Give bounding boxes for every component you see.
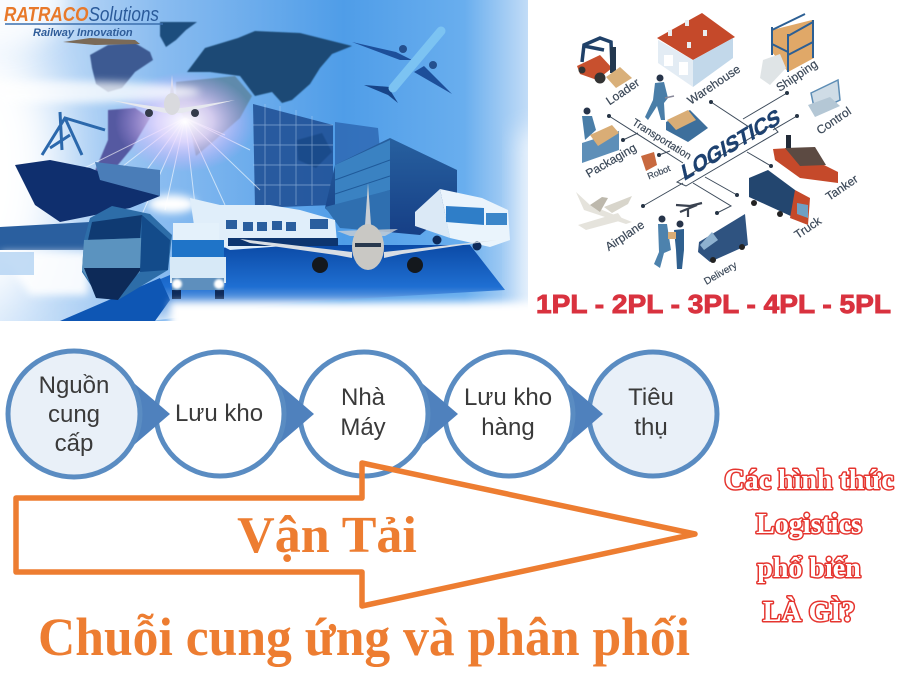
front lorry (170, 223, 226, 299)
connector lines (607, 91, 799, 215)
isometric labels: Packaging (583, 140, 639, 181)
airplane top right (352, 31, 452, 103)
stage: Lưu kho: Lưu kho (175, 400, 263, 427)
isometric labels: Truck (792, 213, 825, 242)
panel: transport photo collage (0, 0, 528, 321)
stage: Nguồn cung cấp: Nguồn (39, 372, 109, 399)
stage: Tiêu thụ: thụ (634, 414, 668, 441)
isometric labels: Shipping (773, 57, 820, 95)
airplane mid (110, 75, 235, 117)
shipping containers (253, 104, 457, 235)
callout: Các hình thức Logistics phổ biến là gì: phổ biến (757, 553, 861, 584)
isometric labels: Tanker (823, 172, 861, 204)
isometric labels: Warehouse (685, 62, 743, 108)
white bottom fade (163, 295, 528, 321)
stage: Nguồn cung cấp: cung (48, 401, 100, 428)
stage: Lưu kho hàng: Lưu kho (464, 384, 552, 411)
light burst (20, 76, 260, 218)
callout: Các hình thức Logistics phổ biến là gì: Các hình thức (724, 465, 894, 496)
stage: Lưu kho hàng (445, 352, 603, 476)
white lorry right (415, 189, 510, 250)
icon: tanker ship (773, 135, 838, 183)
icon: packaging desk (582, 108, 619, 163)
small plane under logo (63, 38, 140, 45)
stage: Nhà Máy (300, 352, 458, 476)
logo wordmark: RATRACOSolutions (4, 4, 159, 26)
isometric labels: Transportation (630, 117, 693, 162)
stage: Tiêu thụ: Tiêu (628, 384, 674, 411)
callout: Các hình thức Logistics phổ biến là gì: LÀ GÌ? (763, 597, 855, 628)
logo: Ratraco Solutions (4, 4, 163, 39)
logo tagline: Railway Innovation (33, 27, 133, 39)
icon: transport worker and trolley (645, 74, 708, 142)
icon: truck (749, 170, 810, 225)
stage: Lưu kho (156, 352, 314, 476)
airplane foreground (240, 183, 497, 273)
cargo ship (0, 112, 160, 250)
icon: control screens (808, 80, 840, 117)
stage: Nhà Máy: Máy (340, 414, 386, 441)
heading: Chuỗi cung ứng và phân phối: Chuỗi cung ứng và phân phối (38, 607, 690, 667)
icon: delivery van (698, 214, 748, 263)
supply chain flow (8, 351, 717, 477)
heading: 1PL to 5PL: 1PL - 2PL - 3PL - 4PL - 5PL (536, 289, 891, 319)
isometric labels: Robot (646, 163, 672, 181)
icon: airplane (576, 192, 632, 230)
icon: warehouse (657, 13, 735, 87)
icon: drone (676, 203, 702, 217)
callout: Các hình thức Logistics phổ biến là gì (724, 465, 894, 628)
world map (90, 22, 352, 178)
callout: Các hình thức Logistics phổ biến là gì: Logistics (756, 509, 862, 540)
isometric labels: Loader (603, 75, 642, 108)
icon: robot (641, 152, 657, 171)
isometric labels: Delivery (702, 260, 739, 288)
isometric labels: Control (814, 104, 854, 137)
row of trucks (190, 198, 338, 250)
stage: Lưu kho hàng: hàng (481, 414, 535, 441)
stage: Nhà Máy: Nhà (341, 384, 386, 411)
heading: LOGISTICS: LOGISTICS (680, 104, 782, 186)
arrow: Vận Tải (16, 463, 695, 606)
text: Vận Tải: Vận Tải (237, 507, 417, 564)
icon: forklift (577, 38, 632, 88)
stage: Tiêu thụ (589, 352, 717, 476)
panel: logistics isometric diagram (576, 13, 861, 288)
icon: shelving (760, 14, 814, 85)
isometric labels (583, 57, 861, 288)
stage: Nguồn cung cấp (8, 351, 170, 477)
road (156, 245, 505, 320)
isometric labels: Airplane (603, 217, 647, 254)
stage: Nguồn cung cấp: cấp (55, 430, 93, 457)
locomotive (82, 206, 172, 300)
icon: delivery people (654, 216, 684, 269)
